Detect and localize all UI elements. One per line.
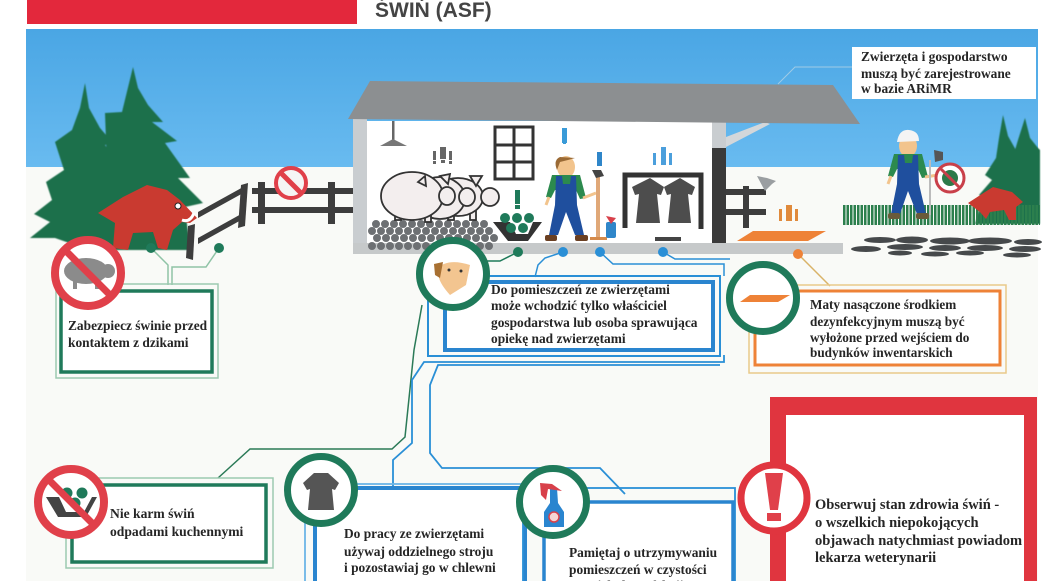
- right fence and bird: [726, 176, 776, 228]
- panel: kitchen waste: odpadami kuchennymi: [110, 524, 244, 539]
- ground background: [26, 160, 1038, 581]
- icon: no pigs sign: [55, 240, 121, 306]
- panel: protect pigs from wild boar: [56, 284, 218, 378]
- right scene: trees: [975, 115, 1040, 224]
- right scene: no feeding sign: [936, 164, 964, 192]
- panel: observe pig health: [770, 397, 1037, 581]
- panel: access to animal rooms: opiekę nad zwierzętami: [491, 331, 626, 346]
- left fence: [186, 182, 353, 260]
- panel: access to animal rooms: gospodarstwa lub osoba sprawująca: [491, 315, 698, 330]
- icon: exclamation mark circle: [741, 465, 807, 531]
- panel: access to animal rooms: może wchodzić tylko właściciel: [491, 298, 667, 313]
- cobblestones under pigs: [372, 224, 497, 246]
- exclamation marks over pigs: [433, 147, 452, 164]
- panel: keep rooms clean: [523, 488, 735, 581]
- panel: separate work clothes: używaj oddzielnego stroju: [344, 544, 494, 559]
- panel: observe pig health: o wszelkich niepokojących: [815, 515, 979, 531]
- left trees: [30, 67, 203, 250]
- icon: mat circle: [730, 264, 796, 332]
- panel: disinfectant mats: [749, 285, 1006, 373]
- panel: access to animal rooms: Do pomieszczeń ze zwierzętami: [491, 282, 670, 297]
- panel: disinfectant mats: Maty nasączone środkiem: [810, 297, 956, 312]
- panel: disinfectant mats: wyłożone przed wejściem do: [810, 330, 970, 345]
- panel: observe pig health: objawach natychmiast powiadom: [815, 533, 1022, 549]
- panel: kitchen waste: [66, 478, 273, 568]
- disinfectant mat: [737, 205, 826, 241]
- panel: separate work clothes: Do pracy ze zwierzętami: [344, 526, 484, 541]
- panel: keep rooms clean: Pamiętaj o utrzymywaniu: [569, 545, 718, 560]
- panel: observe pig health: Obserwuj stan zdrowia świń -: [815, 497, 999, 513]
- panel: observe pig health: lekarza weterynarii: [815, 550, 936, 566]
- right scene: shovel: [929, 150, 943, 215]
- panel: register animals: [852, 47, 1036, 99]
- right scene: boar: [968, 187, 1023, 220]
- panel: access to animal rooms: [428, 276, 720, 356]
- right scene: grass: [843, 205, 1040, 225]
- right scene: farmer: [888, 130, 938, 219]
- panel: separate work clothes: i pozostawiaj go w chlewni: [344, 560, 496, 575]
- panel: protect pigs from wild boar: kontaktem z dzikami: [68, 335, 189, 350]
- icon: no entry sign on fence: [276, 168, 306, 198]
- sky: [26, 29, 1038, 167]
- panel: kitchen waste: Nie karm świń: [110, 506, 195, 521]
- icon: no kitchen waste sign: [38, 469, 104, 535]
- icon: wild boar: [98, 185, 197, 250]
- panel: disinfectant mats: budynków inwentarskich: [810, 345, 953, 360]
- icon: broom and disinfectant spray: [590, 152, 616, 240]
- panel: protect pigs from wild boar: Zabezpiecz świnie przed: [68, 318, 208, 333]
- icon: spray bottle circle: [520, 468, 586, 536]
- connector lines: [151, 67, 852, 494]
- panel: register animals: muszą być zarejestrowane: [861, 66, 1011, 81]
- icon: feed trough: [493, 190, 542, 241]
- window: [495, 127, 533, 179]
- icon: farmer face: [420, 240, 486, 308]
- farm building: [348, 81, 860, 254]
- icon: pigs: [381, 172, 499, 222]
- panel: disinfectant mats: dezynfekcyjnym muszą być: [810, 314, 965, 329]
- icon: clothing circle: [288, 456, 354, 524]
- red header bar: [27, 0, 357, 24]
- right scene: stones: [851, 236, 1042, 258]
- connector dots: [146, 243, 803, 259]
- panel: separate work clothes: [305, 484, 525, 581]
- icon: farmer in building: [545, 128, 596, 241]
- panel: register animals: w bazie ARiMR: [861, 81, 952, 96]
- panel: keep rooms clean: pomieszczeń w czystości: [569, 562, 707, 577]
- panel: register animals: Zwierzęta i gospodarstwo: [861, 49, 1008, 64]
- icon: clothes rack with coats: [625, 147, 701, 241]
